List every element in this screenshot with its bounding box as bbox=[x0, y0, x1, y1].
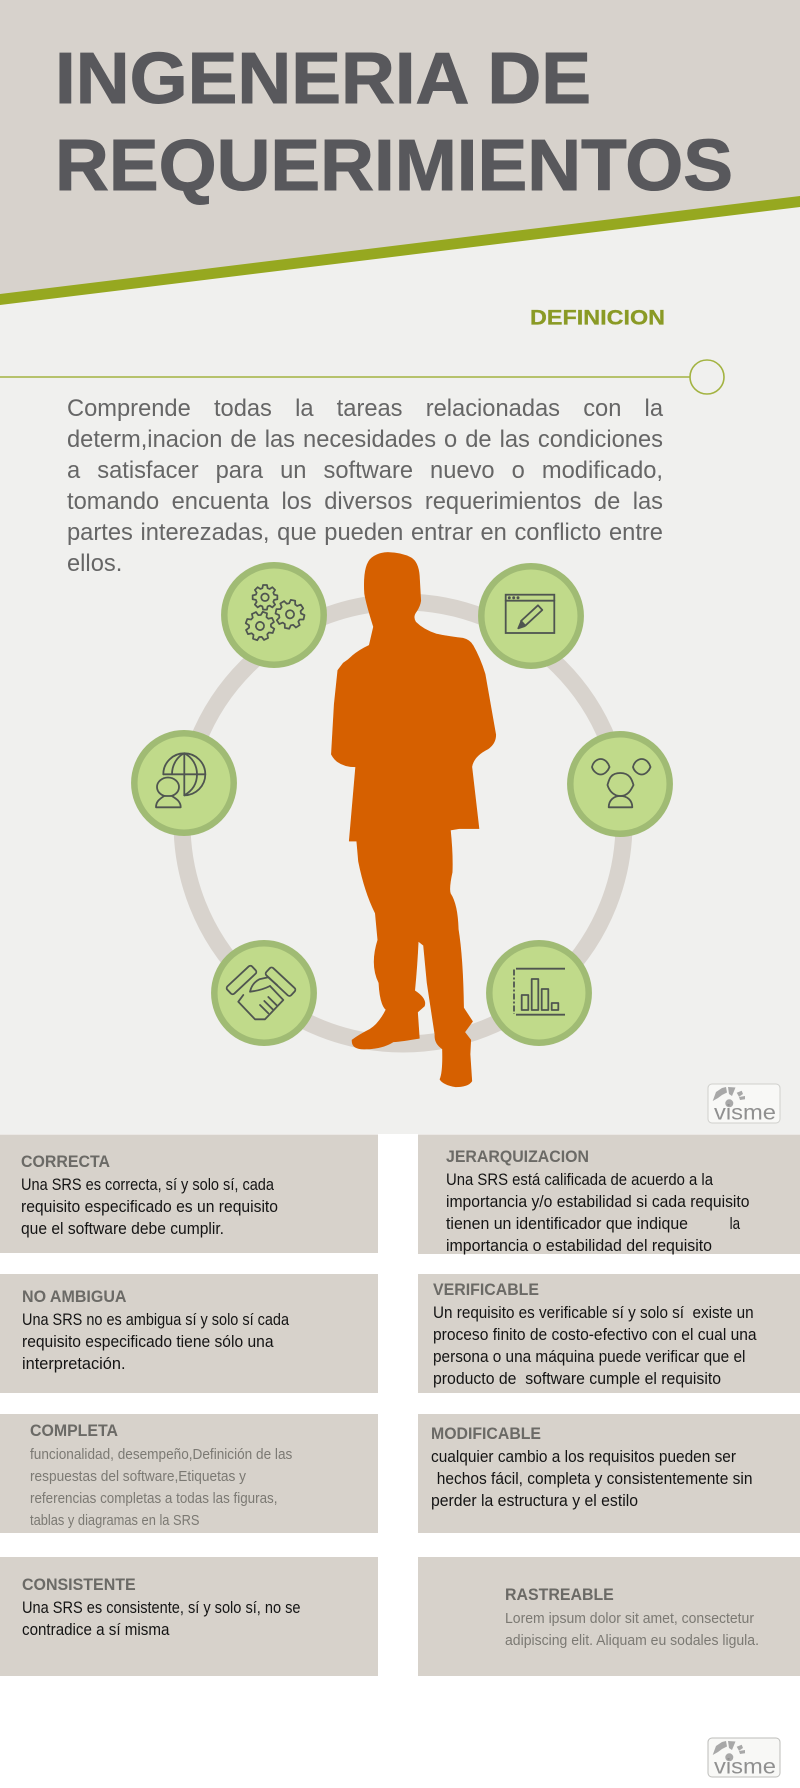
body: no ambigua bbox=[22, 1311, 290, 1373]
icon: globe and person bbox=[156, 753, 205, 807]
body: completa bbox=[30, 1446, 292, 1529]
card: verificable bbox=[418, 1274, 800, 1393]
card: modificable bbox=[418, 1414, 800, 1533]
card: no ambigua bbox=[0, 1274, 378, 1393]
body: consistente bbox=[22, 1599, 300, 1639]
card: completa bbox=[0, 1414, 378, 1533]
body: verificable: producto de software cumple el requisito bbox=[433, 1370, 721, 1388]
body: completa: tablas y diagramas en la SRS bbox=[30, 1512, 200, 1529]
body: completa: respuestas del software,Etiquetas y bbox=[30, 1468, 246, 1485]
heading: no ambigua: NO AMBIGUA bbox=[22, 1288, 127, 1306]
circle: globe and person bbox=[134, 733, 234, 833]
body: jerarquizacion: importancia o estabilidad del requisito bbox=[446, 1237, 712, 1255]
circle: gears bbox=[224, 565, 324, 665]
heading: jerarquizacion: JERARQUIZACION bbox=[446, 1148, 589, 1166]
light background panel bbox=[0, 0, 800, 1134]
body: completa: referencias completas a todas las figuras, bbox=[30, 1490, 278, 1507]
body: correcta: Una SRS es correcta, sí y solo sí, cada bbox=[21, 1176, 275, 1194]
body: jerarquizacion bbox=[446, 1171, 750, 1255]
header band bbox=[0, 0, 800, 295]
section heading: definicion: DEFINICION bbox=[530, 306, 665, 330]
timeline rule with circle bbox=[0, 360, 724, 394]
heading: modificable: MODIFICABLE bbox=[431, 1425, 541, 1443]
heading: verificable: VERIFICABLE bbox=[433, 1281, 539, 1299]
definition paragraph: determ,inacion de las necesidades o de las condiciones bbox=[67, 427, 663, 453]
icon: window and pencil bbox=[506, 595, 554, 633]
body: modificable: cualquier cambio a los requisitos pueden ser bbox=[431, 1448, 736, 1466]
body: consistente: contradice a sí misma bbox=[22, 1621, 170, 1639]
body: completa: funcionalidad, desempeño,Definición de las bbox=[30, 1446, 292, 1463]
definition paragraph: tomando encuenta los diversos requerimientos de las bbox=[67, 489, 663, 515]
title: INGENERIA DE bbox=[55, 39, 591, 119]
card: jerarquizacion bbox=[418, 1134, 800, 1255]
silhouette of a man bbox=[331, 552, 496, 1087]
visme logo top: visme bbox=[714, 1101, 776, 1124]
body: verificable bbox=[433, 1304, 757, 1388]
visme logo bottom: visme bbox=[714, 1755, 776, 1778]
icon: handshake bbox=[226, 965, 296, 1019]
icon: people group bbox=[592, 759, 650, 807]
heading: consistente: CONSISTENTE bbox=[22, 1576, 136, 1594]
circle: window with pencil bbox=[481, 566, 581, 666]
body: no ambigua: Una SRS no es ambigua sí y solo sí cada bbox=[22, 1311, 290, 1329]
card: correcta bbox=[0, 1134, 378, 1253]
icon: bar chart bbox=[514, 969, 565, 1015]
body: jerarquizacion: importancia y/o estabilidad si cada requisito bbox=[446, 1193, 750, 1211]
circle: handshake bbox=[214, 943, 314, 1043]
body: modificable: hechos fácil, completa y consistentemente sin bbox=[437, 1470, 752, 1488]
heading: correcta: CORRECTA bbox=[21, 1153, 110, 1171]
icon: gears bbox=[242, 585, 307, 644]
body: no ambigua: requisito especificado tiene sólo una bbox=[22, 1333, 274, 1351]
body: correcta: requisito especificado es un requisito bbox=[21, 1198, 278, 1216]
body: modificable: perder la estructura y el estilo bbox=[431, 1492, 638, 1510]
definition paragraph: ellos. bbox=[67, 551, 122, 577]
title: REQUERIMIENTOS bbox=[55, 126, 733, 206]
body: rastreable bbox=[505, 1610, 759, 1649]
title bbox=[55, 39, 733, 206]
big ring bbox=[182, 602, 624, 1044]
body: correcta bbox=[21, 1176, 278, 1238]
definition paragraph: Comprende todas la tareas relacionadas con la bbox=[67, 396, 663, 422]
visme logo top bbox=[708, 1084, 780, 1124]
body: jerarquizacion: Una SRS está calificada de acuerdo a la bbox=[446, 1171, 714, 1189]
body: jerarquizacion: tienen un identificador que indique bbox=[446, 1215, 688, 1233]
body: consistente: Una SRS es consistente, sí y solo sí, no se bbox=[22, 1599, 300, 1617]
heading: rastreable: RASTREABLE bbox=[505, 1586, 614, 1604]
card: consistente bbox=[0, 1557, 378, 1676]
green diagonal stripe bbox=[0, 196, 800, 305]
definition paragraph: partes interezadas, que pueden entrar en conflicto entre bbox=[67, 520, 663, 546]
body: verificable: persona o una máquina puede verificar que el bbox=[433, 1348, 745, 1366]
circle: bar chart bbox=[489, 943, 589, 1043]
heading: completa: COMPLETA bbox=[30, 1422, 118, 1440]
card: rastreable bbox=[418, 1557, 800, 1676]
body: modificable bbox=[431, 1448, 752, 1510]
visme logo bottom bbox=[708, 1738, 780, 1778]
definition paragraph: a satisfacer para un software nuevo o modificado, bbox=[67, 458, 663, 484]
body: correcta: que el software debe cumplir. bbox=[21, 1220, 224, 1238]
body: verificable: Un requisito es verificable sí y solo sí existe un bbox=[433, 1304, 754, 1322]
body: rastreable: Lorem ipsum dolor sit amet, consectetur bbox=[505, 1610, 754, 1627]
circle: people group bbox=[570, 734, 670, 834]
definition paragraph bbox=[67, 396, 664, 577]
body: verificable: proceso finito de costo-efectivo con el cual una bbox=[433, 1326, 757, 1344]
body: rastreable: adipiscing elit. Aliquam eu sodales ligula. bbox=[505, 1632, 759, 1649]
body: no ambigua: interpretación. bbox=[22, 1355, 126, 1373]
body: jerarquizacion: la bbox=[730, 1215, 741, 1233]
